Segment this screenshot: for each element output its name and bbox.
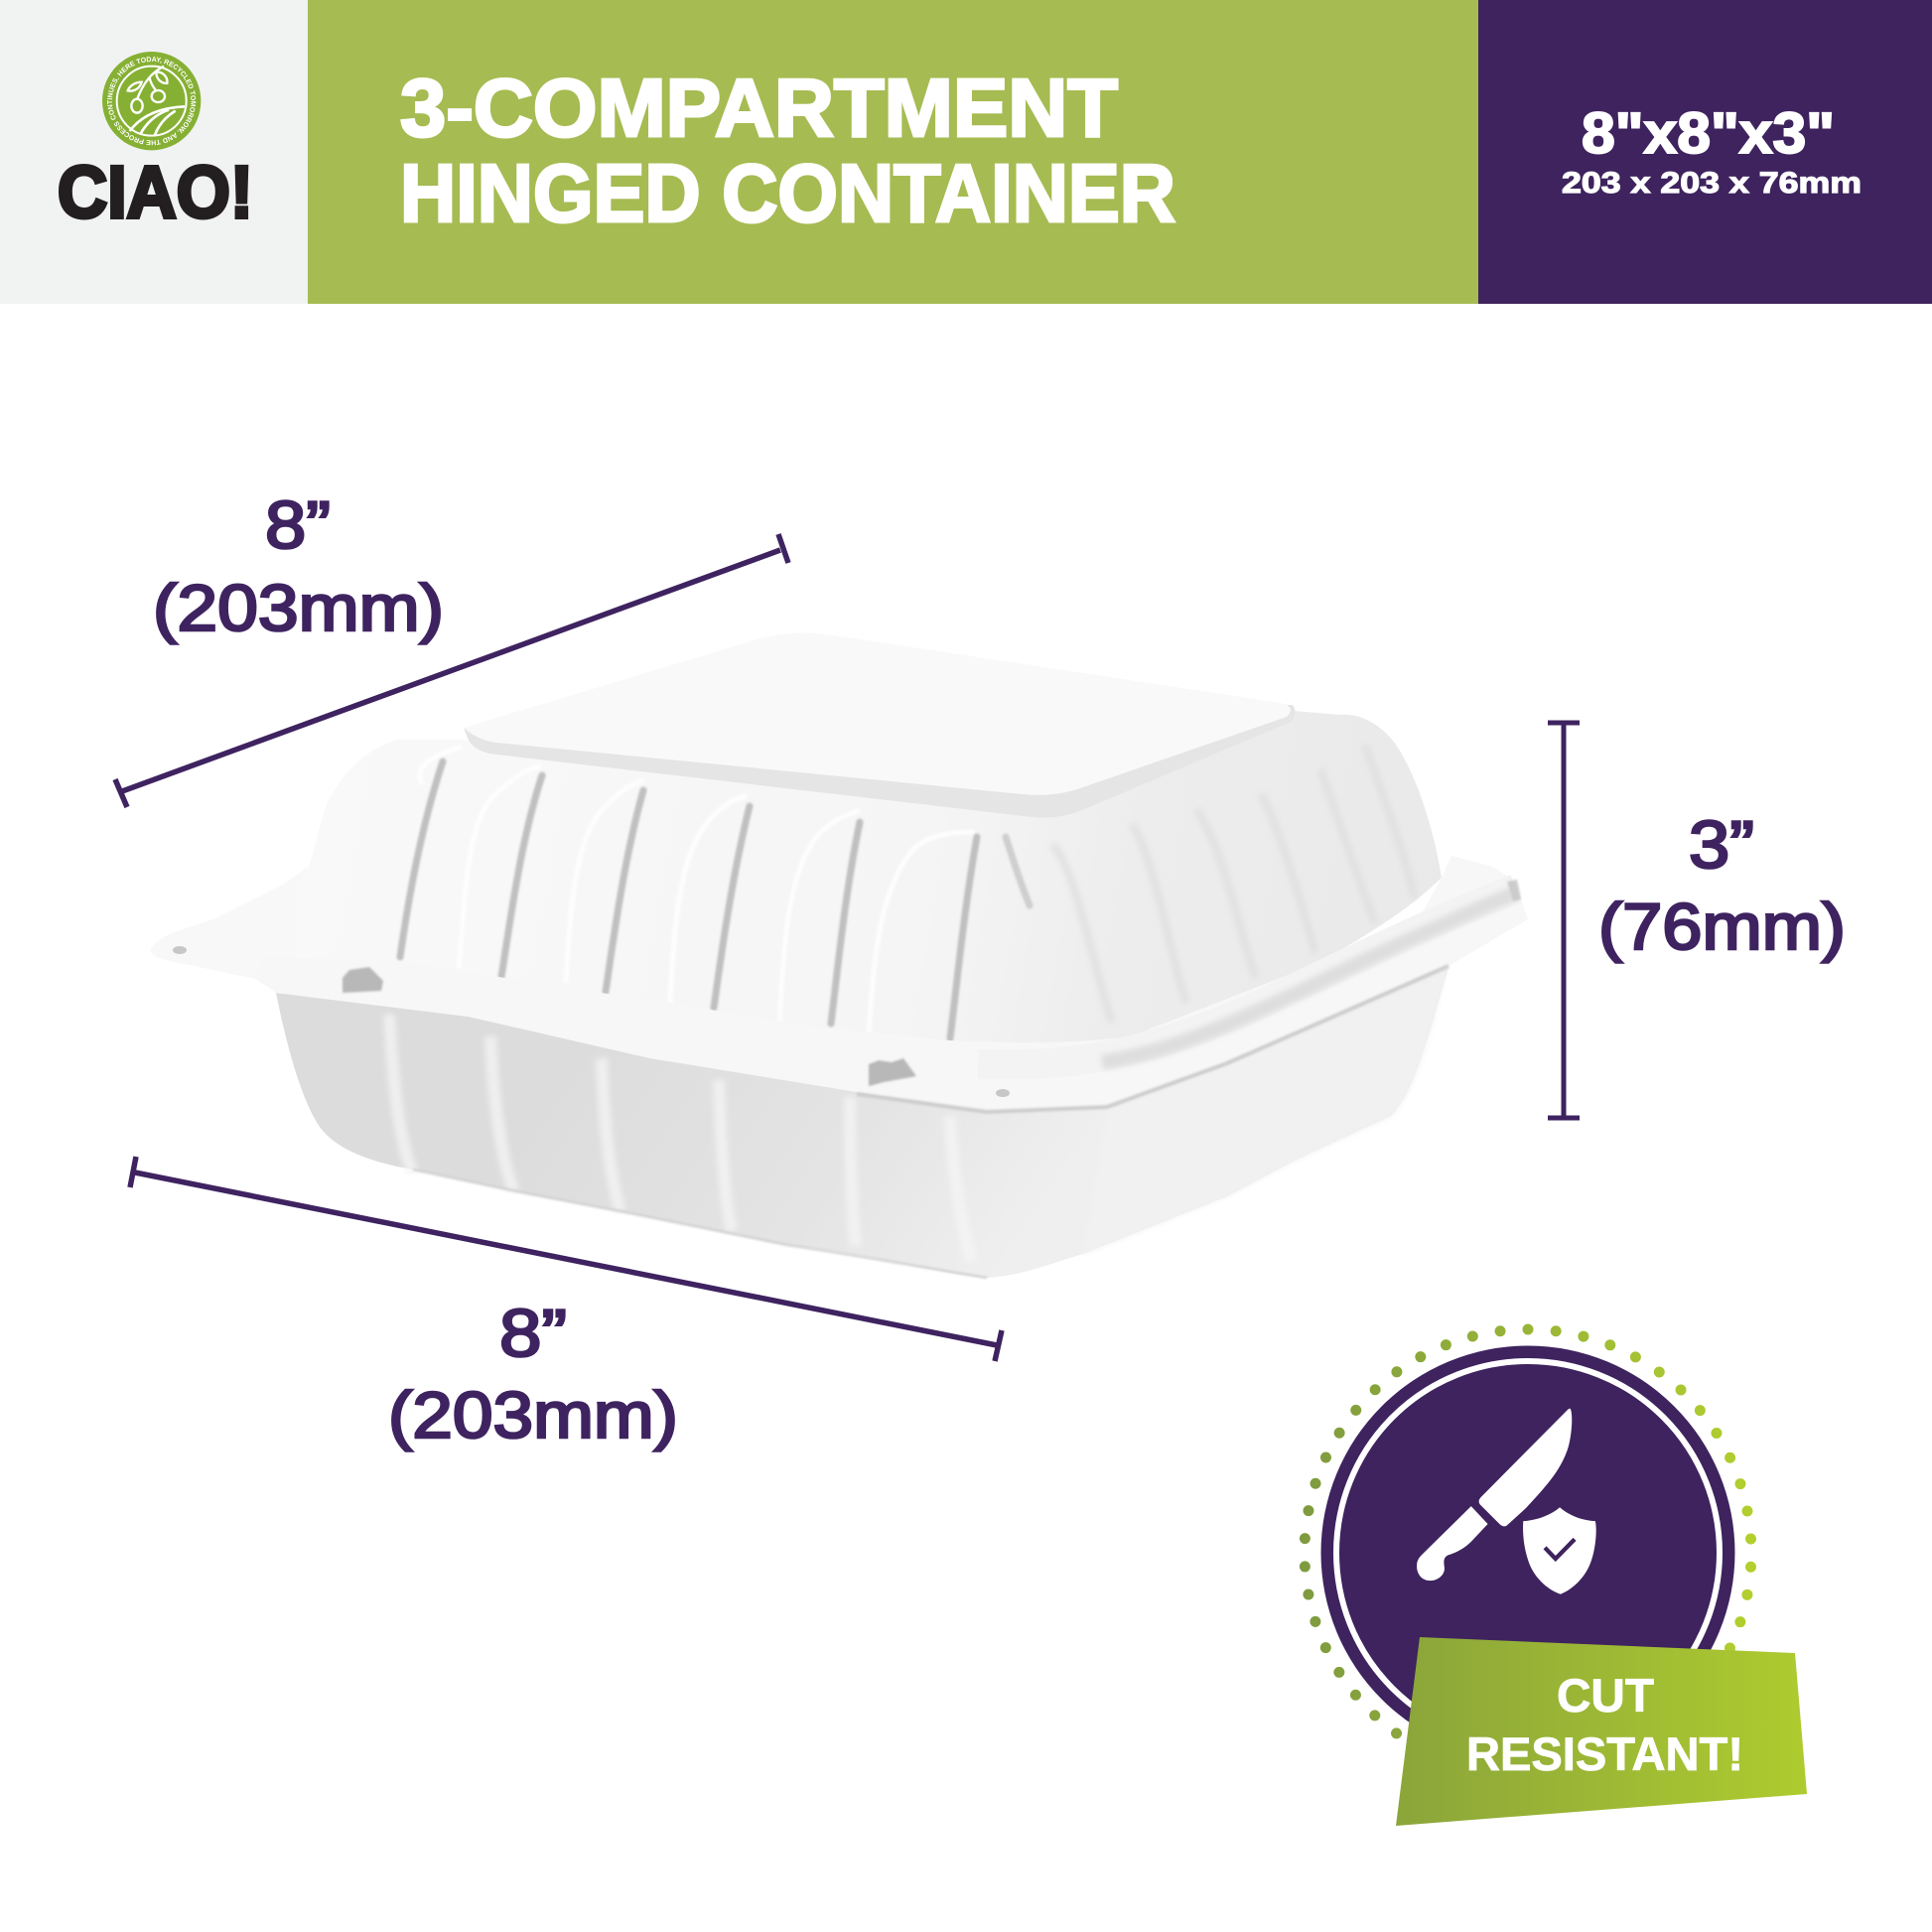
badge disc bbox=[1320, 1346, 1735, 1759]
header band bbox=[0, 0, 1932, 304]
icon: knife bbox=[1417, 1409, 1572, 1581]
container left flange bbox=[151, 868, 343, 983]
lid slots bbox=[400, 761, 977, 1038]
header title panel bbox=[308, 0, 1478, 304]
title line 1: 3-COMPARTMENT bbox=[400, 62, 1118, 154]
label: back width: 8” bbox=[265, 487, 331, 563]
container lid top plate bbox=[464, 633, 1296, 818]
label: front width: 8” bbox=[499, 1296, 567, 1371]
label: back width: (203mm) bbox=[153, 571, 444, 644]
label: front width bbox=[388, 1296, 678, 1451]
dimension: height bbox=[1548, 723, 1846, 1118]
container tray bbox=[276, 968, 1449, 1278]
dimension: front width bbox=[130, 1157, 1002, 1451]
label: height: 3” bbox=[1689, 807, 1754, 883]
dimension line: height bbox=[1548, 723, 1580, 1118]
title line 2: HINGED CONTAINER bbox=[400, 147, 1175, 239]
badge: cut resistant bbox=[1305, 1329, 1807, 1826]
icon: shield with check bbox=[1523, 1507, 1596, 1594]
banner text: resistant: RESISTANT! bbox=[1466, 1727, 1743, 1780]
dimension: back width bbox=[115, 487, 788, 807]
container rim bbox=[173, 856, 1528, 1112]
icon: knife and shield bbox=[1417, 1409, 1596, 1594]
label: height bbox=[1598, 807, 1846, 963]
logo wordmark: CIAO! bbox=[58, 151, 253, 233]
header logo panel bbox=[0, 0, 308, 304]
badge dotted ring bbox=[1305, 1329, 1751, 1776]
label: height: (76mm) bbox=[1598, 890, 1846, 963]
dimension line: front width bbox=[130, 1157, 1002, 1361]
size in millimetres: 203 x 203 x 76mm bbox=[1562, 167, 1862, 200]
badge banner bbox=[1396, 1637, 1807, 1826]
header size panel bbox=[1478, 0, 1932, 304]
product photo: white hinged container bbox=[151, 633, 1528, 1278]
logo emblem: HERE TODAY, RECYCLED TOMORROW. AND THE PROCESS CONTINUES. bbox=[107, 57, 197, 145]
label: back width bbox=[153, 487, 444, 644]
size in inches: 8"x8"x3" bbox=[1582, 101, 1835, 166]
label: front width: (203mm) bbox=[388, 1378, 678, 1451]
container lid dome bbox=[296, 711, 1442, 1055]
banner text: cut: CUT bbox=[1557, 1669, 1654, 1722]
dimension line: back width bbox=[115, 534, 788, 807]
container latch tabs bbox=[343, 967, 916, 1086]
